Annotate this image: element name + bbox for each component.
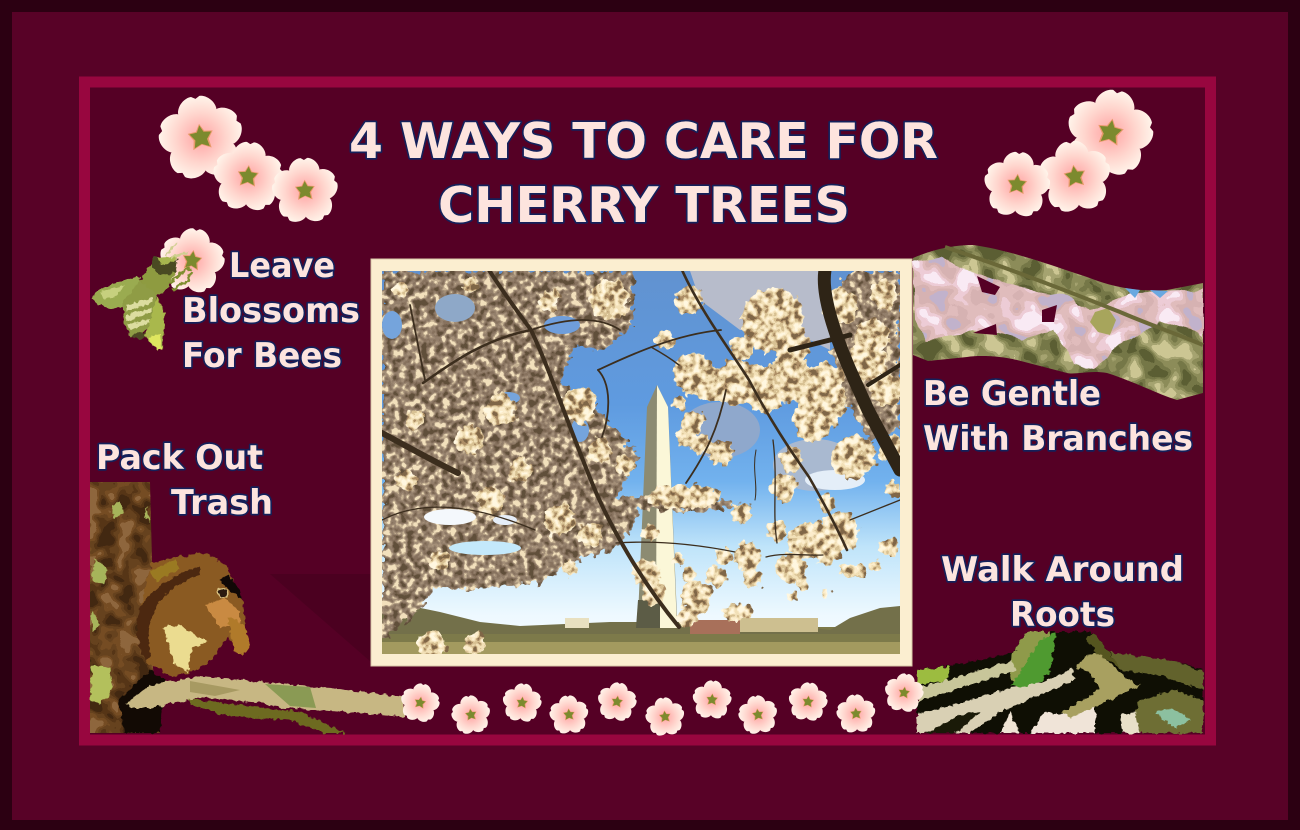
photo frame (371, 259, 912, 666)
tree branches (382, 270, 900, 627)
central photo: Washington Monument through cherry blossoms (371, 259, 912, 666)
inner crimson frame (84, 82, 1210, 740)
row of small blossoms along bottom (395, 671, 928, 740)
label: Leave Blossoms For Bees: For Bees (182, 336, 342, 376)
squirrel (137, 553, 250, 677)
branch line (945, 247, 1203, 345)
label: Pack Out Trash: Pack Out (96, 438, 263, 478)
squirrel on branch illustration (90, 482, 405, 733)
shadow wedge behind photo (270, 574, 371, 662)
branch (127, 676, 405, 717)
moss on trunk (90, 502, 150, 705)
label: Walk Around Roots: Walk Around (941, 550, 1184, 590)
twig (187, 698, 345, 733)
label: Be Gentle With Branches (923, 374, 1193, 459)
bee (92, 243, 192, 350)
label: Leave Blossoms For Bees (182, 246, 360, 376)
tree trunk (90, 482, 160, 733)
bright blossom clusters, left (392, 278, 635, 659)
title (349, 113, 938, 234)
blossoms: top-right cluster (979, 82, 1164, 223)
sky gaps in mass (382, 294, 589, 555)
label: Be Gentle With Branches: Be Gentle (923, 374, 1101, 414)
dark hollow (118, 670, 165, 733)
tree roots illustration (917, 632, 1203, 733)
blossoms: top-left cluster (150, 90, 342, 228)
photo scene (382, 270, 907, 659)
green flower centre (1090, 308, 1116, 335)
label: Walk Around Roots (941, 550, 1184, 635)
label: Be Gentle With Branches: With Branches (923, 419, 1193, 459)
bee on blossom (92, 224, 232, 350)
bark layer (913, 245, 1203, 400)
holes showing background (973, 276, 1057, 335)
title: CHERRY TREES (438, 177, 850, 234)
label: Leave Blossoms For Bees: Blossoms (182, 291, 360, 331)
branch with blossoms banner (913, 245, 1203, 400)
label: Pack Out Trash: Trash (171, 483, 273, 523)
label: Pack Out Trash (96, 438, 273, 523)
label: Walk Around Roots: Roots (1010, 595, 1115, 635)
pale blossoms (913, 256, 1203, 368)
blossom (152, 224, 232, 301)
title: 4 WAYS TO CARE FOR (349, 113, 938, 170)
blossom clusters, right (633, 281, 907, 627)
dark blossom mass (382, 271, 900, 640)
label: Leave Blossoms For Bees: Leave (229, 246, 335, 286)
blue sky pieces (1125, 288, 1168, 298)
